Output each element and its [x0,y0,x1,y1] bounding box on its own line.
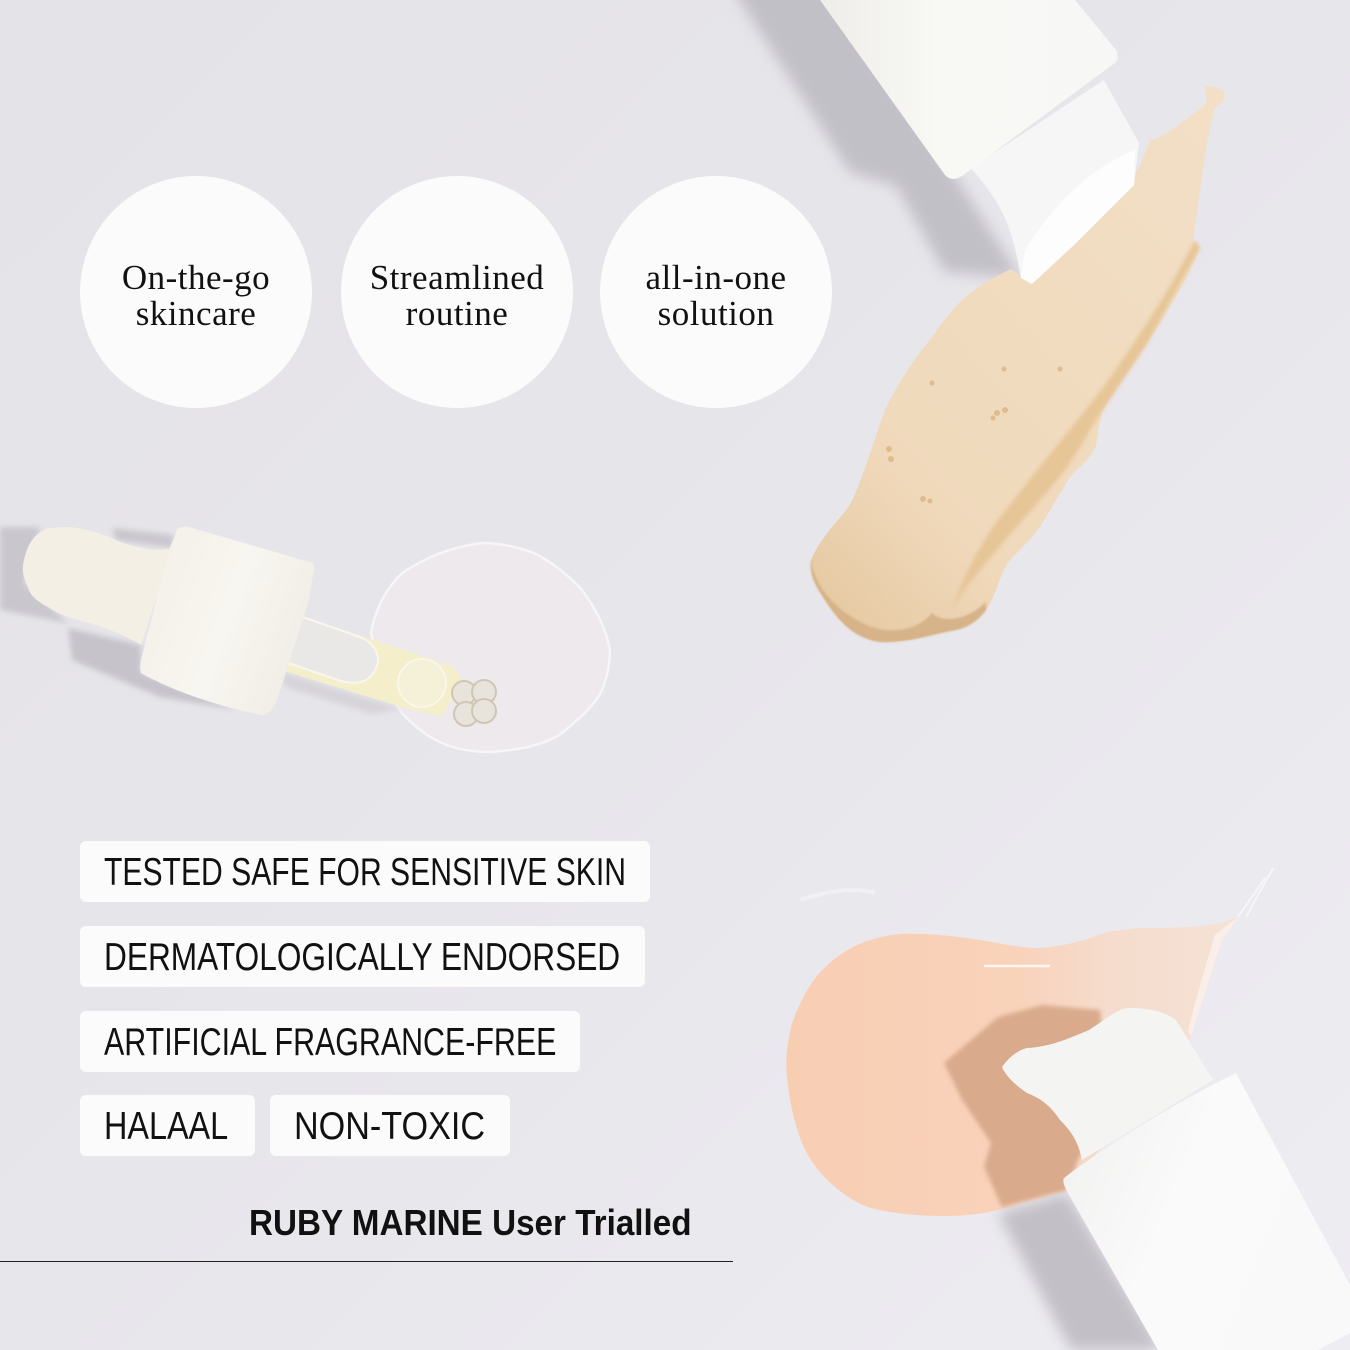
tag: non-toxic: NON-TOXIC [294,1105,485,1148]
dropper shadow [0,527,402,714]
top tube [820,0,1139,284]
tag: fragrance-free: ARTIFICIAL FRAGRANCE-FREE [104,1021,556,1064]
badge: on-the-go skincare [80,176,312,408]
brand line: RUBY MARINE User Trialled [249,1202,692,1243]
badge: streamlined routine: routine [406,294,508,333]
tag: dermatologically endorsed [80,926,645,987]
badge: all-in-one solution [600,176,832,408]
tag: tested safe [80,841,650,902]
badge: on-the-go skincare: skincare [136,294,256,333]
tag: halaal: HALAAL [104,1105,228,1148]
badge: all-in-one solution: all-in-one [645,258,787,297]
tag: halaal [80,1095,255,1156]
dropper [23,527,496,726]
tag: dermatologically endorsed: DERMATOLOGICALLY ENDORSED [104,936,620,979]
bottom tube shadow [998,1193,1162,1350]
beige cream swatch [811,86,1225,642]
clear serum droplet [371,543,610,752]
tag: fragrance-free [80,1011,580,1072]
top tube shadow [727,0,1021,278]
badge: streamlined routine [341,176,573,408]
badge: all-in-one solution: solution [658,294,774,333]
tag: tested safe: TESTED SAFE FOR SENSITIVE SKIN [104,851,626,894]
pink cream swatch [786,868,1273,1216]
bottom tube [1002,1008,1350,1350]
tag: non-toxic [270,1095,510,1156]
badge: on-the-go skincare: On-the-go [122,258,270,297]
badge: streamlined routine: Streamlined [370,258,544,297]
